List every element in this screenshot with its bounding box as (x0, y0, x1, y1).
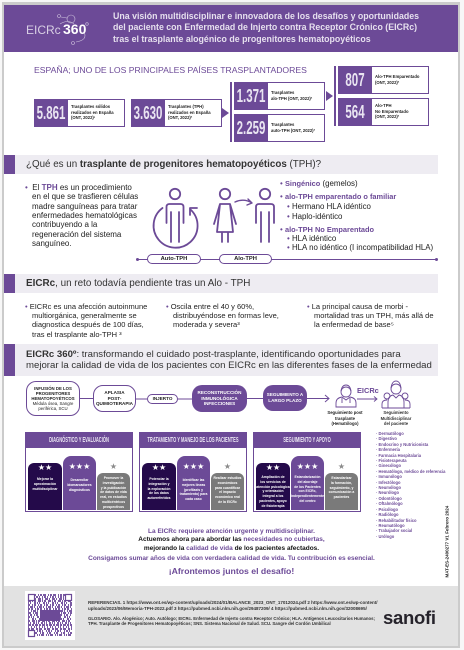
panel: diagnóstico: real, en estudios (100, 495, 127, 499)
pill: Alo-TPH (219, 254, 272, 264)
list: TPH types: • Haplo-idéntico (287, 212, 342, 220)
stat: 2.259: 2.259 (237, 118, 265, 138)
pill: Auto-TPH (147, 254, 201, 264)
title: del paciente con Enfermedad de Injerto contra Receptor Crónico (EICRc) (113, 22, 417, 32)
panel: diagnóstico: ★ (110, 462, 117, 471)
flow: reconstrucción (192, 385, 247, 412)
stat: 3.630: realizados en España (168, 110, 211, 115)
panel: diagnóstico: DIAGNÓSTICO Y EVALUACIÓN (49, 435, 109, 444)
list: TPH types (280, 179, 433, 252)
icon: multidisciplinary team (382, 380, 410, 408)
label: post-transplant follow-up: Seguimiento post (327, 410, 363, 415)
flow connectors (80, 394, 330, 402)
stat: 2.259: Trasplantes (271, 122, 294, 127)
list: specialists: · Urólogo (376, 534, 394, 539)
bullet: morbidity: mortalidad tras un TPH, más allá de (314, 311, 434, 320)
references (88, 600, 378, 611)
list: specialists: · Psicólogo (376, 507, 398, 512)
panel: diagnóstico: aproximación (34, 482, 56, 486)
panel: seguimiento: pacientes (334, 495, 349, 499)
text: TPH definition (25, 183, 138, 248)
title: tras el trasplante alogénico de progenitores hematopoyéticos (113, 34, 371, 44)
section heading: TPH: ¿Qué es un trasplante de progenitores hematopoyéticos (TPH)? (26, 159, 321, 170)
panel: seguimiento: integral a los (263, 494, 283, 498)
stat: 564 (338, 98, 429, 126)
stat: 564: 564 (345, 102, 365, 122)
flow: seguimiento (263, 385, 307, 411)
list: specialists: · Reumatólogo (376, 523, 405, 528)
stat: 5.861: Trasplantes sólidos (71, 104, 110, 109)
stat: 1.371: 1.371 (237, 86, 265, 106)
icon: hematologist (336, 384, 356, 408)
flow: seguimiento: LARGO PLAZO (268, 398, 302, 403)
stat: 3.630 (131, 99, 222, 127)
text: TPH definition: madre sanguíneas para tratar (32, 202, 137, 211)
panel: seguimiento: seguimiento, y (330, 486, 353, 490)
logo: EICRc 360 (26, 14, 89, 45)
panel: diagnóstico: Mejorar la (37, 477, 53, 481)
stat: 2.259 (234, 114, 325, 142)
stat: 807: Alo-TPH Emparentado (375, 74, 419, 79)
flow: aplasia: POST- (108, 396, 121, 401)
stat: 564: No Emparentado (375, 109, 409, 114)
panel: diagnóstico: multidisciplinar (32, 487, 58, 491)
stat: 564: Alo-TPH (375, 103, 392, 108)
stat: 5.861: realizados en España (71, 110, 114, 115)
flow: injerto: INJERTO (153, 396, 172, 401)
panel: tratamiento: TRATAMIENTO Y MANEJO DE LOS PACIENTES (147, 435, 239, 444)
panel: seguimiento: ★★ (266, 463, 280, 472)
closing message (88, 528, 375, 576)
list: specialists: · Farmacia Hospitalaria (376, 453, 421, 458)
panel: seguimiento: del centro (299, 499, 316, 503)
stat: 1.371: Trasplantes (271, 90, 294, 95)
flow: infusión: Médula ósea, Sangre (33, 401, 73, 406)
panel: tratamiento: de la EICRc (218, 500, 237, 504)
stat: 1.371: alo-TPH (ONT, 2022)² (271, 96, 312, 100)
stat: 5.861: 5.861 (37, 103, 65, 123)
label: multidisciplinary follow-up (380, 410, 412, 426)
glossary: TPH. Trasplante de Progenitores Hematopoyéticos; SNS. Sistema Nacional de Salud. SCU. Sangre del Cordón Umbilical (88, 621, 331, 626)
title: Una visión multidisciplinar e innovadora de los desafíos y oportunidades (113, 11, 419, 21)
panel: diagnóstico: diagnósticos (69, 488, 90, 492)
list: specialists: · Endocrino y Nutricionista (376, 442, 428, 447)
panel: tratamiento: ★★ (152, 463, 166, 472)
text: TPH definition: en el que se trasfieren células (32, 192, 138, 201)
label: EICRc arrow (357, 386, 379, 402)
label: multidisciplinary follow-up: Seguimiento (383, 410, 409, 415)
panel: tratamiento: Identificar las (183, 478, 204, 482)
list: TPH types: • Hermano HLA idéntico (287, 202, 371, 210)
panel: diagnóstico (25, 432, 133, 512)
glossary (88, 616, 375, 626)
bullet: EICRc definition: • EICRc es una afección autoinmune (25, 302, 147, 311)
panel: seguimiento: ★ (338, 462, 345, 471)
bullet: prevalence: distribuyéndose en formas leve, (173, 311, 279, 320)
panel: diagnóstico: multicéntricos (102, 500, 125, 504)
flow: aplasia: QUIMIOTERAPIA (96, 401, 133, 406)
bullet: morbidity: la enfermedad de base⁵ (314, 320, 394, 329)
stat: 2.259: auto-TPH (ONT, 2022)² (271, 128, 315, 132)
references: REFERENCIAS. 1 https://www.ont.es/wp-content/uploads/2024/01/BALANCE_2023_ONT_17012024.pdf 2 https://www.ont.es/wp-content/ (88, 600, 377, 605)
panel: tratamiento: cada caso (185, 497, 202, 501)
stat: 3.630: (ONT, 2022)² (168, 115, 192, 120)
panel: tratamiento: autorreferidos (148, 496, 170, 500)
list: TPH types: • alo-TPH emparentado o familiar (280, 192, 396, 201)
flow: seguimiento: SEGUIMIENTO A (267, 392, 303, 397)
bullet: prevalence: moderada y severa³ (173, 320, 240, 329)
text: TPH definition: • El TPH es un procedimiento (25, 183, 132, 192)
closing message: mejorando la calidad de vida de los pacientes afectados. (144, 545, 319, 552)
stat: 807: 807 (345, 70, 365, 90)
pill: Alo-TPH: Alo-TPH (234, 256, 257, 262)
references: uploads/2023/06/Memoria-TPH-2022.pdf 3 https://pubmed.ncbi.nlm.nih.gov/29487209/ 4 https://pubmed.ncbi.nlm.nih.gov/32008695/ (88, 606, 367, 611)
panel: seguimiento: ★★★ (297, 462, 318, 471)
section heading: EICRc 360 (4, 344, 438, 376)
panel: tratamiento: para cuantificar (215, 486, 240, 490)
logo: sanofi: sanofi (383, 607, 436, 628)
panel: tratamiento: mejores líneas (182, 483, 205, 487)
panel: seguimiento: Estandarizar (331, 476, 352, 480)
flow: infusión: INFUSIÓN DE LOS (34, 386, 72, 391)
panel: seguimiento: del abordaje (298, 480, 317, 484)
list: specialists: · Digestivo (376, 436, 397, 441)
panel: diagnóstico: Promover la (104, 476, 123, 480)
panel: tratamiento: tratamiento) para (180, 492, 207, 496)
bullet: prevalence (166, 302, 279, 329)
flow: reconstrucción: INMUNOLÓGICA (201, 396, 238, 401)
heading: España: ESPAÑA; UNO DE LOS PRINCIPALES PAÍSES TRASPLANTADORES (34, 65, 307, 75)
bullet: EICRc definition (25, 302, 147, 339)
panel: diagnóstico: ★★★ (69, 462, 90, 471)
flow: reconstrucción: RECONSTRUCCIÓN (198, 390, 241, 395)
flow: infusión: periférica, SCU (38, 406, 68, 411)
panel: seguimiento: con EICRc, (299, 489, 316, 493)
section heading: TPH (4, 155, 438, 174)
panel: seguimiento: la formación, (331, 481, 352, 485)
arrow: to allo/auto split (222, 108, 229, 118)
list: specialists: · Odontólogo (376, 496, 402, 501)
panel: tratamiento: Potenciar la (149, 477, 169, 481)
list: specialists: · Enfermería (376, 447, 400, 452)
list: specialists: · Trabajador social (376, 528, 412, 533)
footer band (4, 586, 458, 646)
panel: seguimiento: comunicación a (329, 490, 354, 494)
label: post-transplant follow-up (327, 410, 363, 426)
panel: seguimiento: SEGUIMIENTO Y APOYO (283, 435, 331, 444)
label: post-transplant follow-up: (Hematólogo) (332, 421, 358, 426)
label: multidisciplinary follow-up: Multidisciplinar (381, 416, 411, 421)
code: MAT vertical: MAT-ES-2400277 V1 Febrero 2024 (444, 506, 450, 578)
label: EICRc arrow: EICRc (357, 386, 379, 395)
icons: auto and allo transplant figures (152, 188, 275, 249)
list: specialists (376, 431, 446, 539)
panel: seguimiento: Ampliación de (261, 475, 285, 479)
panel: seguimiento: pacientes, apoyo (259, 499, 287, 503)
panel: tratamiento: ★ (224, 462, 231, 471)
bullet: prevalence: • Oscila entre el 40 y 60%, (166, 302, 254, 311)
pill: Auto-TPH: Auto-TPH (161, 256, 187, 262)
panel: seguimiento: de fisioterapia (262, 504, 284, 508)
panel: seguimiento: Estandarización (294, 475, 320, 479)
label: post-transplant follow-up: trasplante (335, 416, 355, 421)
panel: seguimiento: atención psicológica (256, 485, 290, 489)
panel: tratamiento: económico real (215, 495, 240, 499)
panel: seguimiento: los servicios de (260, 480, 286, 484)
panel: seguimiento: independientemente (291, 494, 324, 498)
panel: tratamiento: integración y (148, 482, 170, 486)
list: specialists: · Fisioterapeuta (376, 458, 406, 463)
panel: seguimiento: y orientación (262, 489, 284, 493)
stat: 3.630: 3.630 (134, 103, 162, 123)
panel: diagnóstico: biomarcadores (67, 483, 92, 487)
logo: EICRc 360: 360 (63, 21, 86, 37)
panel: tratamiento: Realizar estudios (214, 476, 241, 480)
flow: infusión: PROGENITORES (36, 391, 70, 396)
arrow: to related/unrelated split (326, 91, 333, 101)
closing message: ¡Afrontemos juntos el desafío! (169, 566, 294, 576)
list: TPH types: • HLA idéntico (287, 234, 336, 243)
section heading: EICRc 360: mejorar la calidad de vida de los pacientes con EICRc en las diferentes fases de la enfermedad (26, 360, 432, 371)
glossary: GLOSARIO. Alo. Alogénico; Auto. Autólogo; EICRc. Enfermedad de Injerto contra Receptor Crónico; HLA. Antígenos Leucocitarios Humanos; (88, 616, 375, 621)
bullet: EICRc definition: diagnostica después de 100 días, (32, 320, 144, 329)
panel: tratamiento: ★★★ (183, 462, 204, 471)
panel: diagnóstico: investigación (103, 481, 124, 485)
panel: seguimiento: de los Pacientes (294, 485, 321, 489)
stat: 5.861: (ONT, 2022)¹ (71, 115, 95, 120)
timeline: Auto-TPH and Alo-TPH (136, 254, 438, 264)
list: TPH types: • HLA no idéntico (I incompatibilidad HLA) (287, 242, 433, 252)
flow: aplasia (93, 385, 136, 412)
panel: diagnóstico: de datos de vida (100, 490, 127, 494)
list: specialists: · Dermatólogo (376, 431, 404, 436)
flow: infusión: HEMATOPOYÉTICOS (31, 396, 75, 401)
closing message: La EICRc requiere atención urgente y multidisciplinar. (148, 528, 315, 535)
panel: diagnóstico: prospectivos (103, 505, 124, 509)
panel: diagnóstico: Desarrollar (71, 478, 88, 482)
stat: 5.861 (34, 99, 125, 127)
QR code (25, 591, 75, 640)
label: multidisciplinary follow-up: del paciente (384, 421, 408, 426)
panel: tratamiento (139, 432, 247, 512)
list: specialists: · Ginecólogo (376, 463, 401, 468)
text: TPH definition: enfermedades hematológicas (32, 211, 137, 220)
bullet: morbidity: • La principal causa de morbi - (307, 302, 408, 311)
list: specialists: · Rehabilitador físico (376, 518, 416, 522)
list: specialists: · Inmunólogo (376, 474, 402, 479)
section heading: EICRc reto (4, 274, 438, 293)
flow: infusión (26, 381, 80, 416)
header banner (4, 5, 458, 52)
section heading: EICRc reto: EICRc, un reto todavía pendiente tras un Alo - TPH (26, 278, 250, 289)
flow: injerto (147, 394, 178, 404)
panel: tratamiento: el impacto (219, 490, 236, 494)
panel: seguimiento (253, 432, 361, 512)
stat: 807 (338, 66, 429, 94)
panel: tratamiento: la exploración (148, 487, 170, 491)
panel: tratamiento: (profilaxis y (184, 488, 203, 492)
list: specialists: · Neumólogo (376, 485, 401, 490)
closing message: Consigamos sumar años de vida con verdadera calidad de vida. Tu contribución es esencial. (88, 554, 375, 562)
text: TPH definition: contribuyendo a la (32, 220, 97, 229)
title (113, 11, 419, 44)
text: TPH definition: regeneración del sistema (32, 230, 121, 239)
section heading: EICRc 360: EICRc 360º: transformando el cuidado post-trasplante, identificando oportunidades para (26, 348, 401, 360)
list: TPH types: • Singénico (gemelos) (280, 179, 358, 188)
panel: tratamiento: de los datos (149, 491, 169, 495)
text: TPH definition: sanguíneo. (32, 239, 72, 248)
list: specialists: · Hematólogo, médico de referencia (376, 469, 445, 474)
panel: tratamiento: económicos (218, 481, 237, 485)
bullet: EICRc definition: tras el trasplante alo-TPH ³ (32, 330, 122, 339)
stat: 807: (ONT, 2022)² (375, 80, 399, 84)
list: specialists: · Oftalmólogo (376, 501, 403, 506)
list: specialists: · Neurólogo (376, 490, 399, 495)
list: specialists: · Radiólogo (376, 512, 399, 517)
bullet: EICRc definition: multiorgánica, generalmente se (32, 311, 137, 320)
bullet: morbidity (307, 302, 434, 329)
stat: 564: (ONT, 2022)² (375, 114, 399, 119)
closing message: Actuemos ahora para abordar las necesidades no cubiertas, (138, 536, 325, 543)
stat: 1.371 (234, 82, 325, 110)
stat: 3.630: Trasplantes (TPH) (168, 104, 204, 109)
flow: aplasia: APLASIA (104, 390, 125, 395)
panel: diagnóstico: ★★ (38, 463, 52, 472)
panel: diagnóstico: y la publicación (101, 486, 126, 490)
logo: EICRc 360: EICRc (26, 23, 61, 37)
list: specialists: · Infectólogo (376, 480, 401, 485)
flow: reconstrucción: INFECCIONES (204, 401, 235, 406)
list: TPH types: • alo-TPH No Emparentado (280, 224, 374, 234)
